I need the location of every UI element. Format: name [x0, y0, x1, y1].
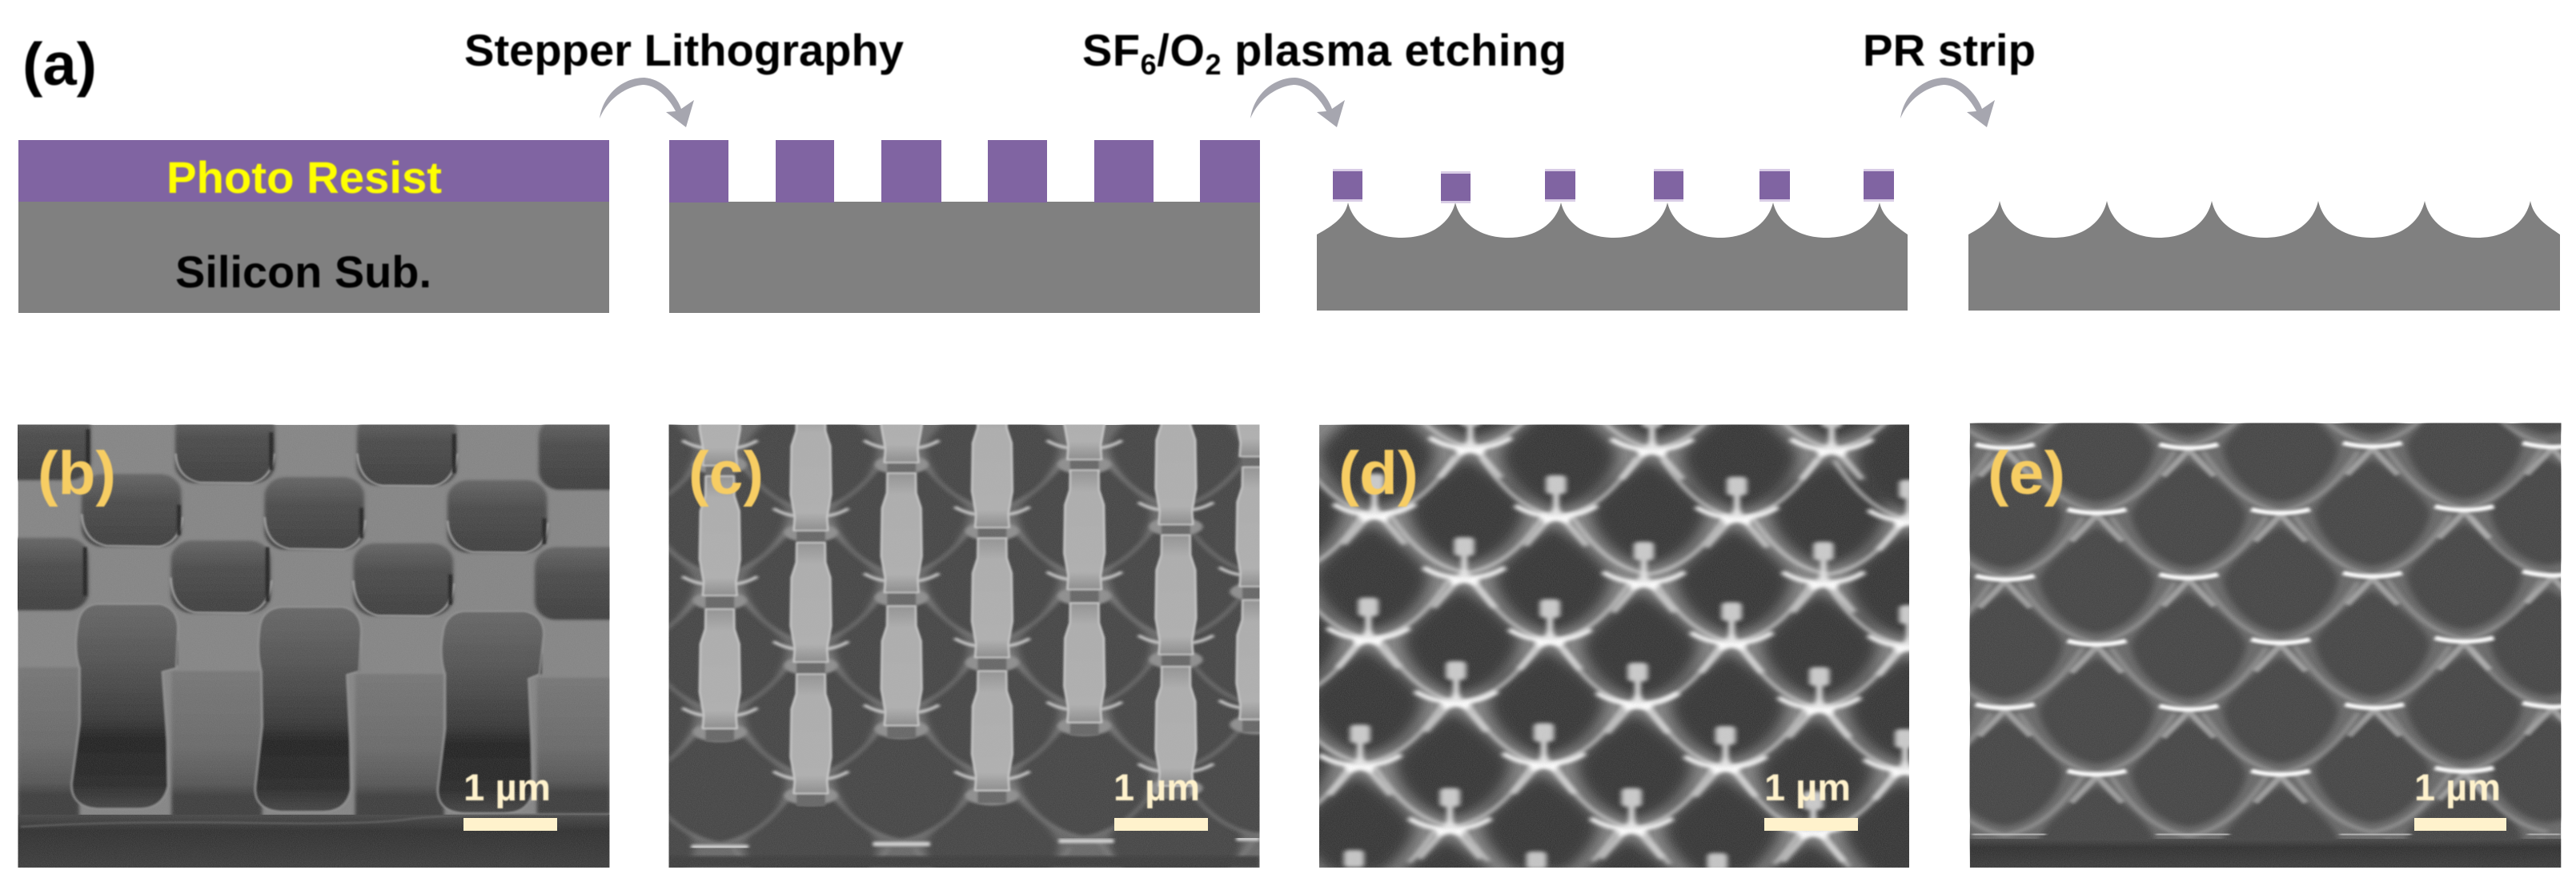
heading: SF6/O2 plasma etching: plasma etching — [1222, 25, 1567, 75]
cleaved pillars — [18, 668, 610, 820]
SEM image (b): square holes and cleaved edge — [18, 424, 610, 868]
scale bar (d): 1 µm: 1 µm — [1764, 766, 1851, 808]
dish rims — [1319, 424, 1906, 868]
SEM image (d): dishes with residual resist tips — [1319, 424, 1909, 868]
label: Silicon Sub.: Silicon Sub. — [175, 247, 431, 297]
pillars — [697, 424, 1260, 807]
arrow: step 3 to step 4 — [1900, 78, 1995, 127]
bottom edge band — [669, 856, 1259, 868]
bright vertices — [1976, 443, 2573, 803]
panel: starting stack with photo resist on silicon — [18, 140, 609, 313]
heading: SF6/O2 plasma etching: 6 — [1141, 48, 1157, 81]
scale bar (e): 1 µm — [2414, 766, 2506, 831]
heading: PR strip: PR strip — [1863, 25, 2036, 75]
heading: Stepper Lithography: Stepper Lithography — [464, 25, 904, 75]
scale bar (d): 1 µm — [1764, 766, 1858, 831]
arrow: step 1 to step 2 — [600, 78, 694, 127]
SEM image (c): resist pillars over etched dishes — [669, 424, 1260, 868]
panel: patterned photo resist after lithography — [669, 140, 1260, 313]
star vertices with stems and resist tips — [1319, 424, 1909, 868]
dish rims — [1969, 423, 2549, 839]
panel: silicon microlens profile after PR strip — [1968, 201, 2560, 311]
dish rims — [669, 452, 1260, 856]
bottom edge band — [1970, 839, 2561, 868]
panel label (b): (b) — [38, 439, 116, 507]
deep trenches — [71, 604, 544, 813]
scale bar (b): 1 µm — [463, 766, 557, 831]
panel label (e): (e) — [1988, 439, 2065, 507]
scale bar (c): 1 µm — [1113, 766, 1208, 831]
photo resist layer — [18, 140, 609, 202]
scale bar (c): 1 µm: 1 µm — [1113, 766, 1200, 808]
arrow: step 2 to step 3 — [1250, 78, 1345, 127]
silicon substrate layer — [18, 202, 609, 313]
SEM image (e): finished concave dish array — [1969, 423, 2562, 868]
panel label (c): (c) — [688, 439, 764, 507]
bottom substrate band — [18, 815, 609, 868]
heading: SF6/O2 plasma etching: /O — [1157, 25, 1205, 75]
label: Photo Resist: Photo Resist — [167, 152, 442, 202]
panel: plasma etched silicon with resist caps — [1317, 169, 1908, 311]
panel label (a): (a) — [22, 30, 97, 98]
bottom flat bars — [1972, 834, 2561, 835]
scale bar (e): 1 µm: 1 µm — [2414, 766, 2501, 808]
heading: SF6/O2 plasma etching: 2 — [1205, 48, 1222, 81]
panel label (d): (d) — [1338, 439, 1418, 507]
heading: SF6/O2 plasma etching: SF — [1082, 25, 1141, 75]
bottom flat bars — [692, 839, 1259, 847]
scale bar (b): 1 µm: 1 µm — [463, 766, 551, 808]
